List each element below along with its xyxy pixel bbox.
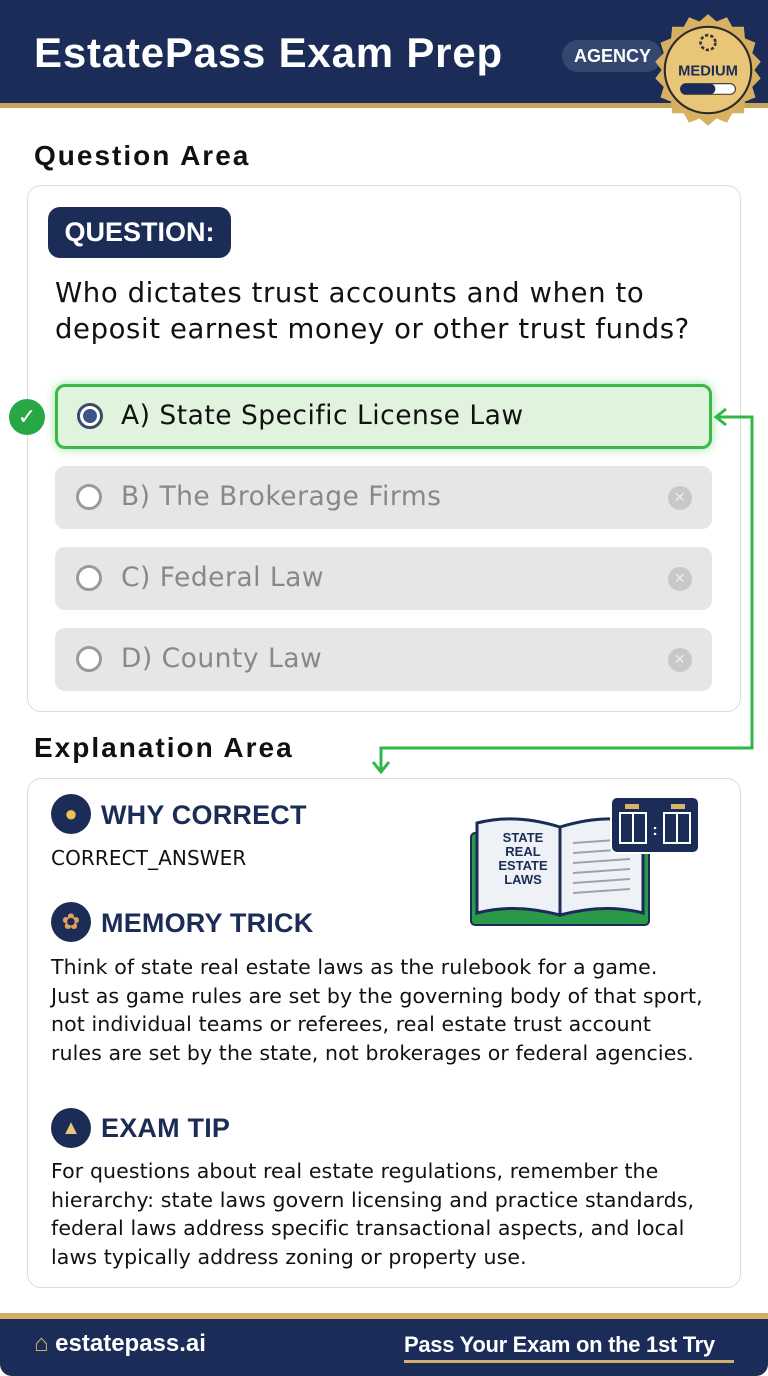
option C (55, 547, 712, 610)
option B: ✕ (674, 490, 686, 506)
panel: question (27, 185, 741, 712)
question label: QUESTION: (64, 217, 214, 247)
medal badge: MEDIUM (678, 63, 738, 79)
heading: why correct: WHY CORRECT (101, 800, 307, 830)
option A correct: A) State Specific License Law (121, 400, 524, 431)
icon: brain (51, 902, 91, 942)
icon: brain: ✿ (62, 909, 80, 934)
text: exam tip: hierarchy: state laws govern licensing and practice standards, (51, 1188, 694, 1212)
panel: explanation (27, 778, 741, 1288)
illustration: book and scoreboard: REAL (505, 844, 541, 859)
agency pill: AGENCY (574, 46, 651, 66)
question text: deposit earnest money or other trust funds? (55, 313, 690, 345)
text: exam tip: federal laws address specific transactional aspects, and local (51, 1216, 684, 1240)
illustration: book and scoreboard: STATE (503, 830, 544, 845)
option B (55, 466, 712, 529)
text: memory trick (50, 955, 703, 1065)
text: correct answer: CORRECT_ANSWER (51, 846, 246, 870)
heading: memory trick: MEMORY TRICK (101, 908, 313, 938)
heading: question area: Question Area (34, 140, 250, 171)
tagline: Pass Your Exam on the 1st Try (404, 1332, 715, 1357)
heading: explanation area: Explanation Area (34, 732, 294, 763)
question text (55, 277, 690, 345)
text: memory trick: Just as game rules are set by the governing body of that sport, (51, 984, 703, 1008)
footer (0, 1313, 768, 1376)
question text: Who dictates trust accounts and when to (55, 277, 644, 309)
illustration: book and scoreboard: LAWS (504, 872, 542, 887)
illustration: book and scoreboard (470, 798, 698, 926)
option B: B) The Brokerage Firms (121, 481, 441, 512)
text: memory trick: Think of state real estate laws as the rulebook for a game. (51, 955, 657, 979)
illustration: book and scoreboard: ESTATE (498, 858, 548, 873)
icon: check: ✓ (18, 404, 36, 429)
option D (55, 628, 712, 691)
option D: ✕ (674, 652, 686, 668)
illustration: book and scoreboard: : (652, 822, 658, 839)
option C: C) Federal Law (121, 562, 324, 593)
text: exam tip: For questions about real estate regulations, remember the (51, 1159, 658, 1183)
agency pill (562, 40, 662, 72)
question label (48, 207, 231, 258)
text: exam tip: laws typically address zoning or property use. (51, 1245, 527, 1269)
option A correct (55, 384, 712, 449)
heading: exam tip: EXAM TIP (101, 1113, 230, 1143)
text: memory trick: rules are set by the state, not brokerages or federal agencies. (51, 1041, 694, 1065)
option C: ✕ (674, 571, 686, 587)
icon: grad cap: ▲ (61, 1117, 81, 1139)
icon: lightbulb (51, 794, 91, 834)
text: exam tip (51, 1159, 694, 1269)
footer logo: ⌂ estatepass.ai (34, 1330, 206, 1357)
medal badge (655, 14, 761, 126)
header (0, 0, 768, 108)
icon: lightbulb: ● (64, 801, 78, 826)
text: memory trick: not individual teams or referees, real estate trust account (51, 1012, 651, 1036)
icon: grad cap (51, 1108, 91, 1148)
arrow: answer to explanation (372, 408, 754, 774)
title: EstatePass Exam Prep (34, 29, 503, 76)
icon: check (9, 399, 45, 435)
option D: D) County Law (121, 643, 322, 674)
